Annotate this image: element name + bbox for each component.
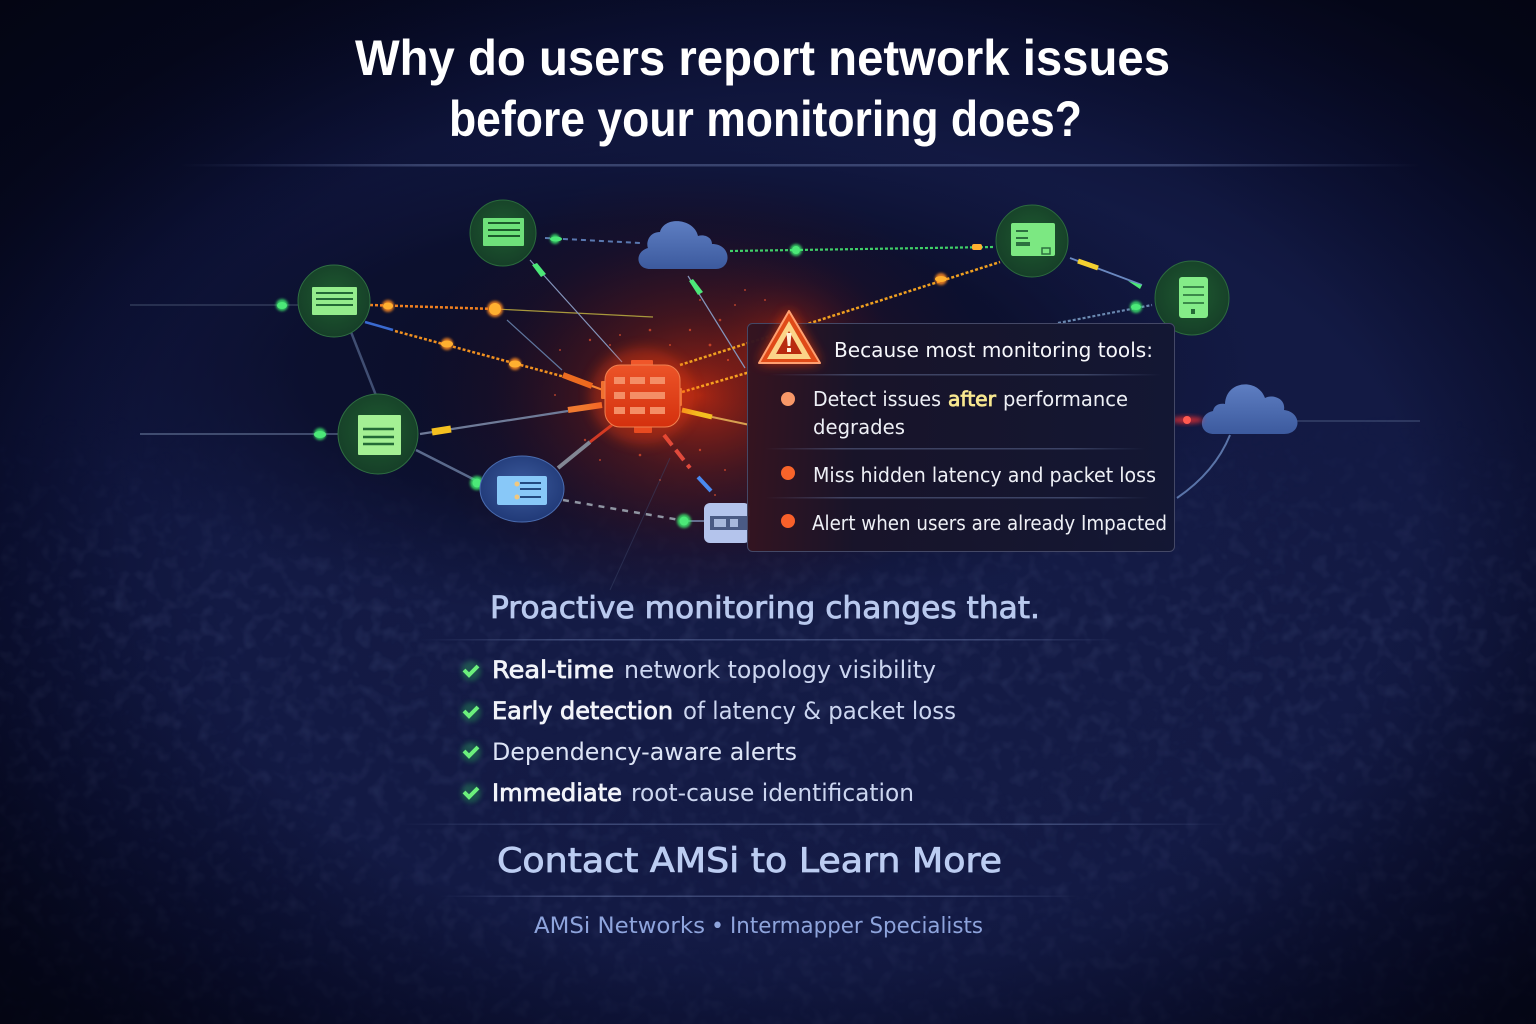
item: immediate (461, 779, 914, 807)
icon: warning triangle (759, 310, 820, 363)
hub: central failing router (590, 348, 694, 444)
cloud top (638, 221, 728, 269)
node: blue device (480, 456, 564, 522)
item: dependency-aware: Dependency-aware alerts (492, 738, 797, 766)
signal dots (276, 234, 1142, 528)
item: real-time: network topology visibility (624, 656, 936, 684)
item: immediate: root-cause identification (631, 779, 914, 807)
footer (534, 914, 983, 939)
bullet: alert impacted: Alert when users are already Impacted (812, 511, 1167, 535)
item: immediate: Immediate (492, 779, 622, 807)
item: early detection: Early detection (492, 697, 673, 725)
footer: Intermapper Specialists (730, 914, 983, 939)
bullet: detect after: degrades (813, 415, 905, 439)
bullet: miss latency: Miss hidden latency and packet loss (813, 463, 1156, 487)
call to action: Contact AMSi to Learn More (497, 841, 1002, 881)
item: early detection: of latency & packet loss (683, 697, 956, 725)
node: server left (298, 265, 370, 337)
panel: why monitoring fails (748, 310, 1174, 552)
connection lines (130, 238, 1420, 590)
bullet: detect after: Detect issues (813, 387, 941, 411)
item: early detection (461, 697, 956, 725)
node: server lower left (338, 394, 418, 474)
panel heading: Because most monitoring tools: (834, 338, 1153, 362)
bullet: detect after (781, 387, 1128, 439)
bullet: detect after: after (948, 387, 997, 411)
node: server top right (996, 205, 1068, 277)
node: document far right (1155, 261, 1229, 335)
title (355, 30, 1170, 147)
cloud right (1202, 384, 1298, 434)
item: real-time: Real-time (492, 656, 614, 684)
red alert link (1171, 416, 1203, 424)
network topology diagram (130, 200, 1420, 590)
item: real-time (461, 656, 936, 684)
node: server top (470, 200, 536, 266)
device box (704, 503, 750, 543)
checklist (461, 656, 956, 807)
subheading: Proactive monitoring changes that. (490, 591, 1040, 626)
footer: • (711, 914, 724, 939)
footer: AMSi Networks (534, 914, 705, 939)
title: Why do users report network issues (355, 30, 1170, 86)
title: before your monitoring does? (449, 91, 1082, 147)
bullet: detect after: performance (1003, 387, 1128, 411)
